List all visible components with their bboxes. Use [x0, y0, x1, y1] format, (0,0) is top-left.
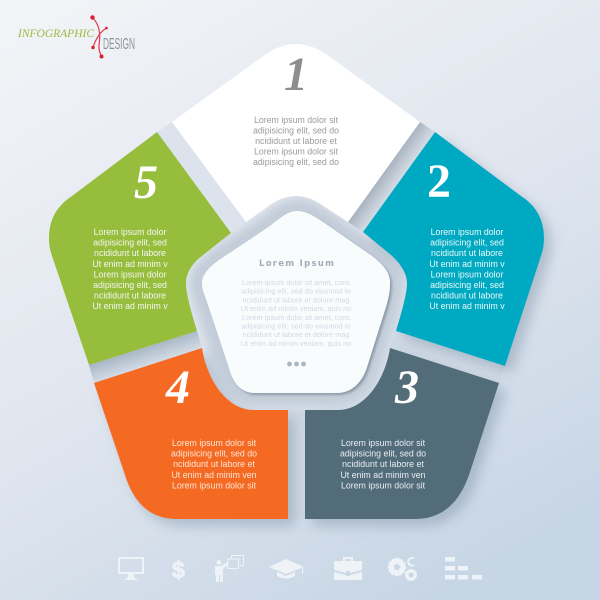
band between panels 1 and 5: [157, 122, 246, 233]
panel 3 number: 3: [394, 361, 419, 414]
panel 1 text: [253, 115, 339, 167]
center pentagon shape: [202, 211, 390, 393]
panel 1 text: Lorem ipsum dolor sit: [254, 146, 339, 156]
band between panels 2 and 3: [390, 331, 505, 383]
band between panels 1 and 2: [348, 122, 435, 232]
center text: adipisicing elit, sed do eiusmod te: [241, 287, 351, 296]
panel 2 text: Ut enim ad minim v: [429, 259, 505, 269]
logo: INFOGRAPHIC: [17, 26, 95, 40]
center text: Lorem ipsum dolor sit amet, cons: [242, 278, 350, 287]
panel 4 number: 4: [165, 361, 190, 414]
panel 4 text: ncididunt ut labore et: [173, 459, 255, 469]
center text: Ut enim ad minim veniam, quis no: [241, 339, 351, 348]
center text: ncididunt ut labore et dolore mag: [243, 295, 349, 304]
panel 4 text: adipisicing elit, sed do: [171, 449, 257, 459]
panel 3 shape: [305, 348, 499, 519]
panel 5 shape: [49, 132, 231, 365]
panel 4: orange: [94, 348, 288, 519]
panel 3 text: [340, 438, 426, 490]
panel 5: green: [49, 132, 231, 365]
panel 2 text: Lorem ipsum dolor: [431, 269, 503, 279]
band between panels 4 and 3: [288, 410, 305, 519]
panel 4 shape: [94, 348, 288, 519]
center title: Lorem Ipsum: [259, 259, 334, 269]
band between panels 5 and 4: [89, 331, 202, 383]
panel 5 text: Lorem ipsum dolor: [94, 269, 166, 279]
panel 5 text: Lorem ipsum dolor: [94, 227, 166, 237]
panel 4 text: Lorem ipsum dolor sit: [172, 438, 257, 448]
panel 2 text: [429, 227, 505, 311]
panel 4 text: Ut enim ad minim ven: [171, 470, 257, 480]
icon: graduation cap: [269, 559, 304, 578]
logo: [17, 15, 135, 59]
panel 4 text: [171, 438, 257, 490]
icon: gears: [388, 558, 417, 581]
panel 1 text: Lorem ipsum dolor sit: [254, 115, 339, 125]
panel 5 text: adipisicing elit, sed: [93, 280, 167, 290]
panel 4 text: Lorem ipsum dolor sit: [172, 480, 257, 490]
center halo shadow: [202, 211, 390, 393]
panel 3 text: Ut enim ad minim ven: [340, 470, 426, 480]
panel 5 text: Ut enim ad minim v: [92, 301, 168, 311]
center dots: [287, 362, 306, 366]
center text: Lorem ipsum dolor sit amet, cons: [242, 313, 350, 322]
panel 2 text: ncididunt ut labore: [431, 248, 503, 258]
center text: Ut enim ad minim veniam, quis no: [241, 304, 351, 313]
panel 3 text: ncididunt ut labore et: [342, 459, 424, 469]
panel 2 shape: [363, 132, 544, 366]
center text: ncididunt ut labore et dolore mag: [243, 330, 349, 339]
panel 2 text: adipisicing elit, sed: [430, 238, 504, 248]
panel 3 text: adipisicing elit, sed do: [340, 449, 426, 459]
panel 2 text: Lorem ipsum dolor: [431, 227, 503, 237]
icon: monitor: [118, 557, 144, 580]
panel 3: slate: [305, 348, 499, 519]
icon: briefcase: [334, 557, 362, 580]
icon: presenter with boards: [215, 555, 244, 582]
panel 2 text: adipisicing elit, sed: [430, 280, 504, 290]
panel 5 number: 5: [134, 156, 158, 209]
panel 3 text: Lorem ipsum dolor sit: [341, 438, 426, 448]
panel 5 text: Ut enim ad minim v: [92, 259, 168, 269]
panel 5 text: ncididunt ut labore: [94, 248, 166, 258]
panel 2 number: 2: [427, 155, 451, 208]
logo: DESIGN: [103, 36, 135, 53]
panel 1: white: [172, 44, 420, 222]
center pentagon panel: [202, 211, 390, 393]
panel 2: teal: [363, 132, 544, 366]
panel 5 text: [92, 227, 168, 311]
center text: [241, 278, 351, 348]
panel 3 text: Lorem ipsum dolor sit: [341, 480, 426, 490]
panel 5 text: ncididunt ut labore: [94, 291, 166, 301]
panel 2 text: ncididunt ut labore: [431, 291, 503, 301]
panel 2 text: Ut enim ad minim v: [429, 301, 505, 311]
panel 1 number: 1: [284, 48, 308, 101]
panel 1 text: ncididunt ut labore et: [255, 136, 337, 146]
icon: dollar: $: [172, 557, 185, 583]
center text: adipisicing elit, sed do eiusmod te: [241, 322, 351, 330]
icon: bar blocks: [445, 557, 482, 580]
panel 5 text: adipisicing elit, sed: [93, 238, 167, 248]
panel 1 text: adipisicing elit, sed do: [253, 126, 339, 136]
panel 1 text: adipisicing elit, sed do: [253, 157, 339, 167]
panel 1 shape: [172, 44, 420, 222]
